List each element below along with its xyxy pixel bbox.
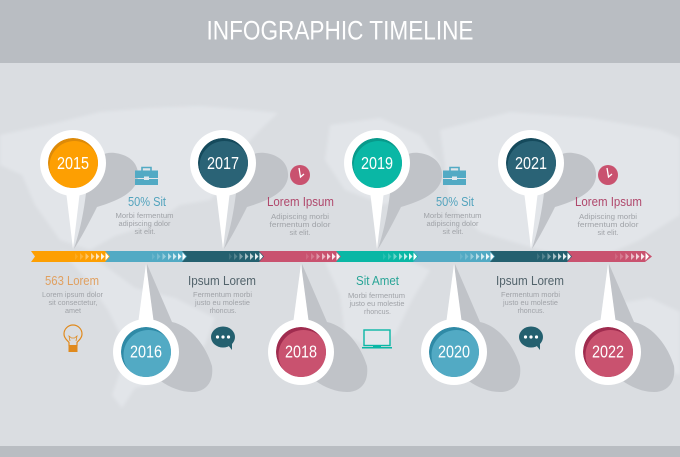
text block: Ipsum Lorem 2017: Fermentum morbi xyxy=(193,290,252,299)
footer band xyxy=(0,446,680,457)
text block: Sit Amet xyxy=(348,273,405,316)
text block: Sit Amet: rhoncus. xyxy=(364,307,391,316)
pin: 2020: 2020 xyxy=(438,342,470,362)
text block: Lorem Ipsum 2021: fermentum dolor xyxy=(578,220,639,229)
text block: 563 Lorem: amet xyxy=(65,306,82,315)
pin: 2020 xyxy=(421,264,487,385)
header band xyxy=(0,0,680,63)
text block: 50% Sit 2019: sit elit. xyxy=(442,227,464,236)
text block: 50% Sit xyxy=(116,194,174,236)
text block: Lorem Ipsum 2021: sit elit. xyxy=(598,228,618,237)
text block: 50% Sit: 50% Sit xyxy=(128,194,166,209)
text block: Lorem Ipsum 2021 xyxy=(575,194,642,237)
pin: 2021: 2021 xyxy=(515,153,547,173)
icon: laptop xyxy=(362,330,392,348)
text block: Ipsum Lorem 2021: Ipsum Lorem xyxy=(496,273,564,288)
title: INFOGRAPHIC TIMELINE xyxy=(206,16,474,46)
pin: 2016: 2016 xyxy=(130,342,162,362)
text block: Ipsum Lorem 2017: Ipsum Lorem xyxy=(188,273,256,288)
pin: 2019 xyxy=(344,130,410,249)
text block: 563 Lorem: Lorem ipsum dolor xyxy=(42,290,103,299)
pin: 2022 xyxy=(575,264,641,385)
text block: Ipsum Lorem 2021: rhoncus. xyxy=(518,306,544,315)
text block: Ipsum Lorem 2021: justo eu molestie xyxy=(502,298,558,307)
text block: Lorem Ipsum 2021: Adipiscing morbi xyxy=(579,212,637,221)
text block: Ipsum Lorem 2017: justo eu molestie xyxy=(194,298,250,307)
icon: briefcase 2019 xyxy=(443,168,466,185)
icon: clock 2021 xyxy=(598,165,618,185)
text block: Sit Amet: Sit Amet xyxy=(356,273,399,288)
text block: Ipsum Lorem 2017 xyxy=(188,273,256,315)
pin: 2019: 2019 xyxy=(361,153,393,173)
text block: 50% Sit: Morbi fermentum xyxy=(116,211,174,220)
pin: 2015 xyxy=(40,130,106,249)
text block: 50% Sit 2019: 50% Sit xyxy=(436,194,474,209)
pin: 2015: 2015 xyxy=(57,153,89,173)
timeline arrow bar xyxy=(31,251,652,262)
text block: Lorem Ipsum 2021: Lorem Ipsum xyxy=(575,194,642,209)
pin: 2018 xyxy=(268,264,334,385)
pin shadows xyxy=(74,153,674,392)
text block: 50% Sit 2019: adipiscing dolor xyxy=(426,219,479,228)
pin: 2017: 2017 xyxy=(207,153,239,173)
text block: 563 Lorem: 563 Lorem xyxy=(45,273,99,288)
text block: Ipsum Lorem 2021 xyxy=(496,273,564,315)
icon: chat bubble 2021 xyxy=(519,326,543,350)
text block: Lorem Ipsum 2017 xyxy=(267,194,334,237)
text block: 50% Sit 2019: Morbi fermentum xyxy=(424,211,482,220)
text block: Lorem Ipsum 2017: Adipiscing morbi xyxy=(271,212,329,221)
pin: 2017 xyxy=(190,130,256,249)
text block: Lorem Ipsum 2017: Lorem Ipsum xyxy=(267,194,334,209)
text block: 563 Lorem: sit consectetur, xyxy=(48,298,98,307)
pin: 2016 xyxy=(113,264,179,385)
text block: Sit Amet: Morbi fermentum xyxy=(348,291,405,300)
world map xyxy=(0,106,680,408)
text block: Lorem Ipsum 2017: fermentum dolor xyxy=(270,220,331,229)
text block: 563 Lorem xyxy=(42,273,103,315)
text block: Sit Amet: justo eu molestie xyxy=(349,299,404,308)
text block: 50% Sit: sit elit. xyxy=(134,227,156,236)
icon: chat bubble 2017 xyxy=(211,326,235,350)
text block: Ipsum Lorem 2021: Fermentum morbi xyxy=(501,290,560,299)
pin: 2022: 2022 xyxy=(592,342,624,362)
text block: 50% Sit 2019 xyxy=(424,194,482,236)
pin: 2018: 2018 xyxy=(285,342,317,362)
icon: light bulb xyxy=(64,325,82,352)
icon: briefcase 2015 xyxy=(135,168,158,185)
text block: 50% Sit: adipiscing dolor xyxy=(118,219,171,228)
text block: Ipsum Lorem 2017: rhoncus. xyxy=(210,306,236,315)
pin: 2021 xyxy=(498,130,564,249)
icon: clock 2017 xyxy=(290,165,310,185)
text block: Lorem Ipsum 2017: sit elit. xyxy=(290,228,310,237)
